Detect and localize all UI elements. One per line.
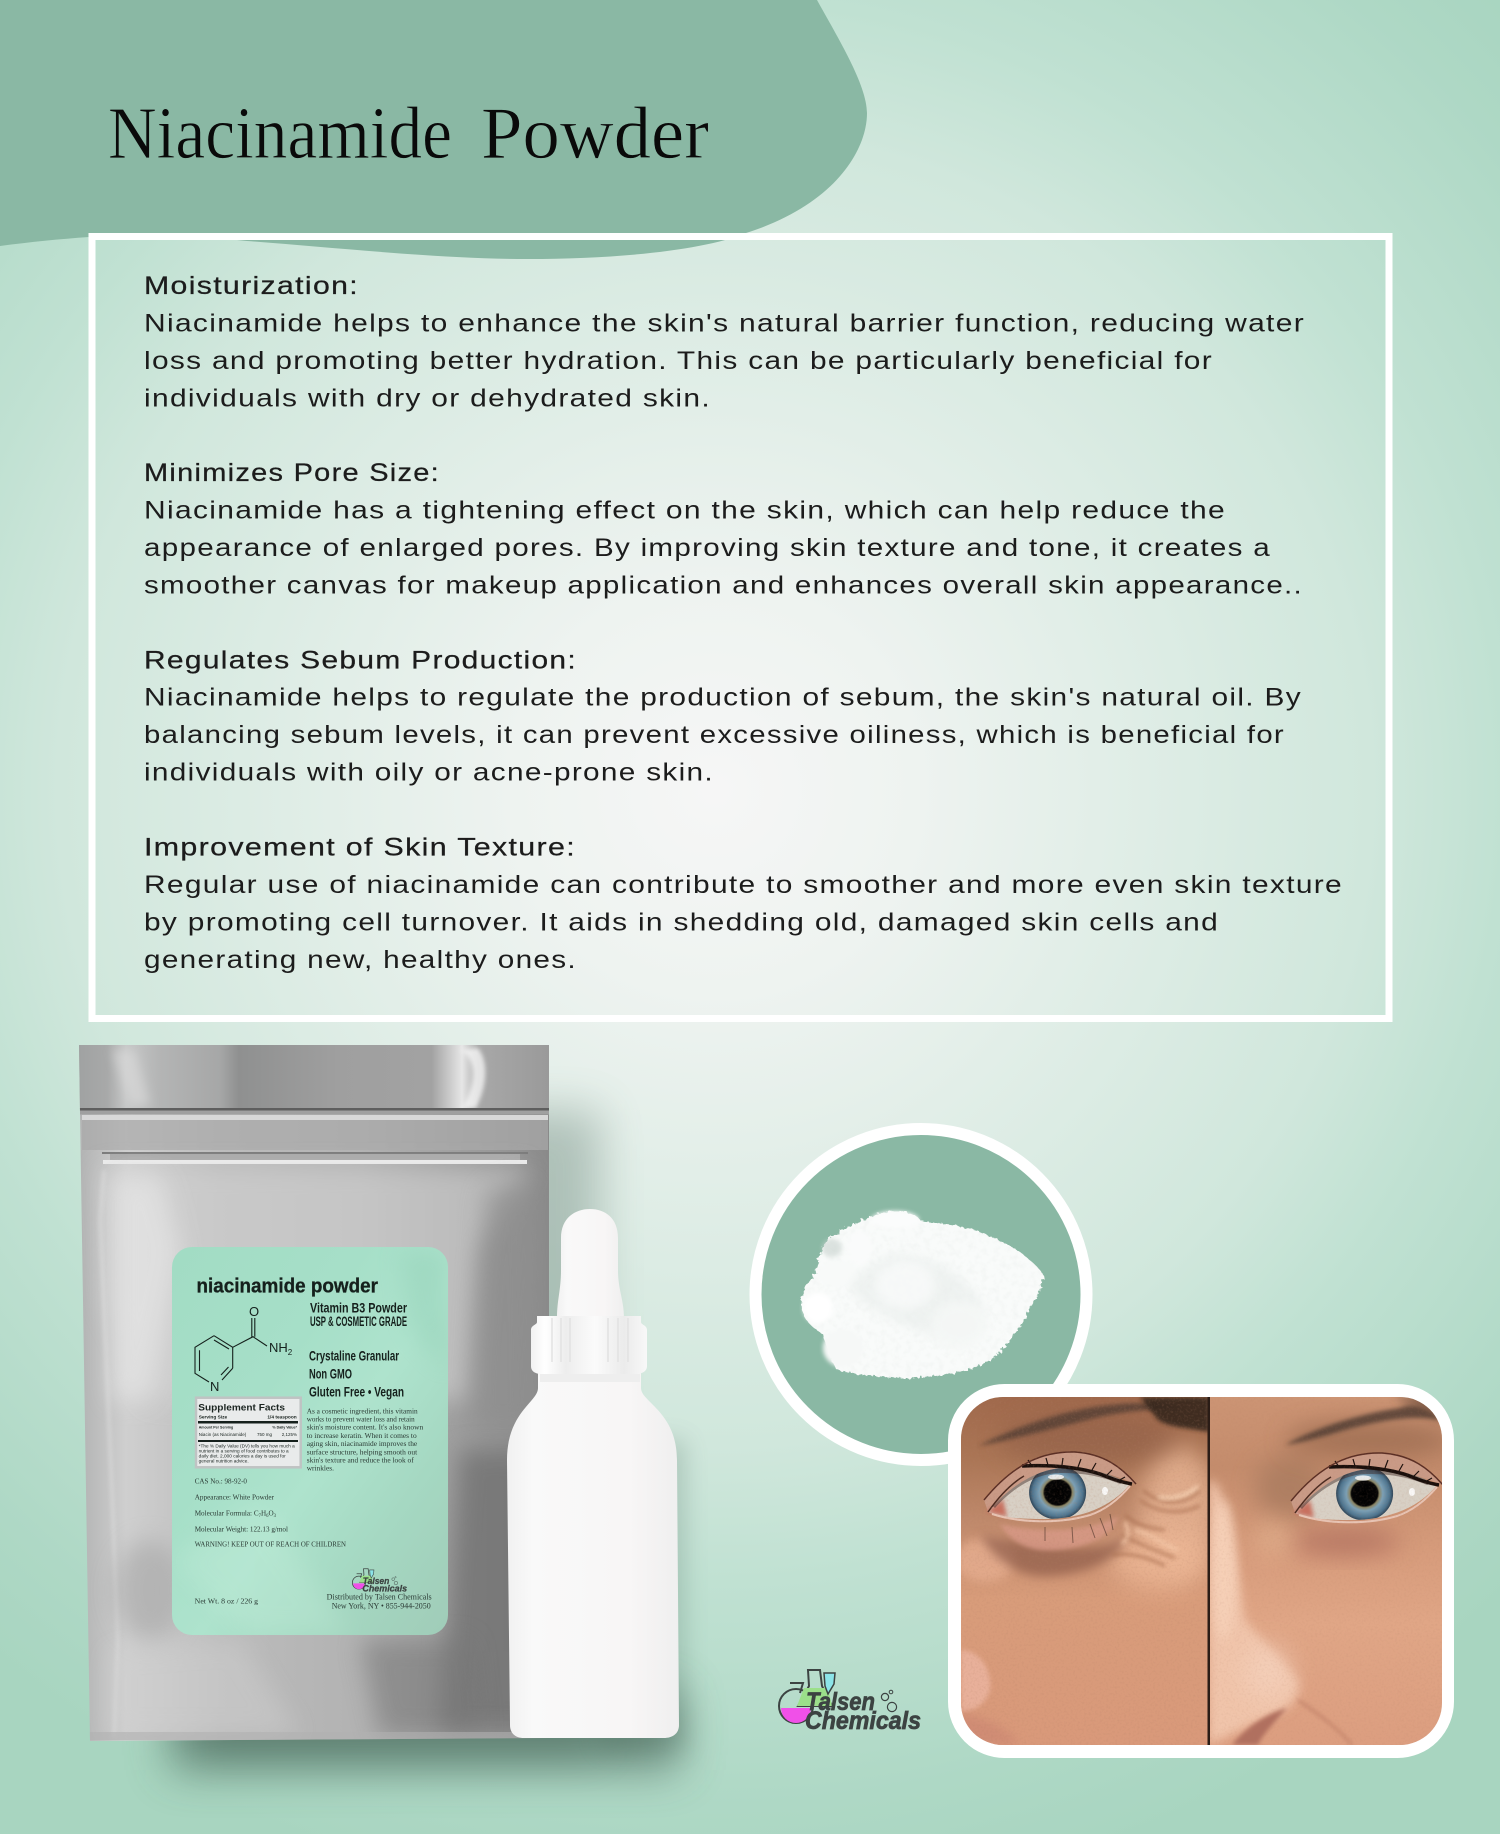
molecule diagram: 2 [288, 1348, 293, 1357]
title: Niacinamide [108, 93, 452, 175]
text block: pore size: Minimizes Pore Size: [144, 459, 440, 487]
powder circle [756, 1129, 1086, 1460]
label description: works to prevent water loss and retain [307, 1415, 415, 1424]
supplement facts box: *The % Daily Value (DV) tells you how much a [199, 1443, 295, 1448]
title [108, 93, 709, 175]
photo left: aged skin [955, 1397, 1216, 1745]
label description: skin's texture and reduce the look of [307, 1455, 414, 1464]
label attributes: Crystaline Granular [309, 1348, 399, 1364]
panel: benefits text frame [92, 236, 1389, 1018]
label specifications: Molecular Formula: C [195, 1508, 263, 1517]
header blob [0, 0, 867, 259]
molecule diagram [195, 1304, 293, 1394]
label attributes: Non GMO [309, 1366, 352, 1382]
text block: skin texture: Improvement of Skin Texture: [144, 834, 576, 862]
label title: niacinamide powder [196, 1276, 378, 1298]
label specifications: 7 [259, 1514, 261, 1519]
supplement facts box: daily diet. 2,000 calories a day is used for [199, 1453, 286, 1458]
title: Powder [481, 93, 709, 175]
label description: As a cosmetic ingredient, this vitamin [307, 1406, 418, 1415]
text block: pore size [144, 459, 1303, 599]
supplement facts box: nutrient in a serving of food contributes to a [199, 1448, 289, 1453]
label specifications: 3 [274, 1514, 276, 1519]
label specifications: O [268, 1508, 274, 1517]
molecule diagram: N [210, 1379, 219, 1394]
label specifications [195, 1476, 346, 1605]
label description: skin's moisture content. It's also known [307, 1423, 423, 1432]
label specifications: H [261, 1508, 267, 1517]
molecule diagram: O [249, 1304, 259, 1319]
supplement facts box: 2,125% [282, 1432, 297, 1437]
text block: pore size: smoother canvas for makeup application and enhances overall skin appearance.. [144, 571, 1303, 599]
label specifications: Molecular Weight: 122.13 g/mol [195, 1524, 288, 1533]
supplement facts box: general nutrition advice. [199, 1459, 249, 1464]
product: foil pouch [79, 1045, 550, 1741]
label distributor: Distributed by Talsen Chemicals [327, 1592, 432, 1601]
text block: sebum: individuals with oily or acne-prone skin. [144, 759, 714, 787]
label specifications: CAS No.: 98-92-0 [195, 1476, 247, 1485]
supplement facts box: Niacin (as Niacinamide) [199, 1432, 247, 1437]
label attributes [309, 1348, 404, 1400]
text block: sebum: Niacinamide helps to regulate the production of sebum, the skin's natural oil. By [144, 684, 1302, 712]
text block: skin texture [144, 834, 1343, 974]
label attributes: Gluten Free • Vegan [309, 1384, 404, 1400]
label specifications: Net Wt. 8 oz / 226 g [195, 1596, 258, 1605]
supplement facts box: Supplement Facts [198, 1403, 285, 1414]
text block: skin texture: by promoting cell turnover. It aids in shedding old, damaged skin cells and [144, 908, 1219, 936]
label distributor: New York, NY • 855-944-2050 [332, 1602, 431, 1611]
powder pile [802, 1211, 1044, 1378]
text block: skin texture: Regular use of niacinamide can contribute to smoother and more even skin texture [144, 871, 1343, 899]
photo right: smooth skin [1209, 1397, 1455, 1745]
label grade text: Vitamin B3 Powder [310, 1300, 407, 1316]
text block: sebum: balancing sebum levels, it can prevent excessive oiliness, which is beneficial for [144, 721, 1285, 749]
label grade text: USP & COSMETIC GRADE [310, 1313, 407, 1329]
text block: pore size: appearance of enlarged pores. By improving skin texture and tone, it creates a [144, 534, 1271, 562]
label small logo [352, 1569, 408, 1594]
supplement facts box: 1/4 teaspoon [267, 1414, 297, 1420]
label description: aging skin, niacinamide improves the [307, 1439, 418, 1448]
label specifications: Appearance: White Powder [195, 1492, 274, 1501]
before and after eye photo [954, 1390, 1455, 1752]
text block: skin texture: generating new, healthy ones. [144, 946, 577, 974]
label description: surface structure, helping smooth out [307, 1447, 418, 1456]
label specifications: WARNING! KEEP OUT OF REACH OF CHILDREN [195, 1540, 346, 1549]
supplement facts box: % Daily Value* [272, 1426, 298, 1430]
text block: sebum [144, 646, 1302, 787]
label description: to increase keratin. When it comes to [307, 1431, 417, 1440]
supplement facts box: Amount Per Serving [199, 1426, 233, 1430]
label grade text [310, 1300, 407, 1329]
label specifications: 6 [266, 1514, 269, 1519]
product: dropper bottle [507, 1209, 679, 1738]
text block: pore size: Niacinamide has a tightening effect on the skin, which can help reduce the [144, 497, 1226, 525]
text block: moisturization: loss and promoting better hydration. This can be particularly beneficial for [144, 347, 1213, 375]
supplement facts box: 750 mg [257, 1432, 272, 1437]
molecule diagram: NH [269, 1340, 288, 1355]
text block: moisturization: Niacinamide helps to enhance the skin's natural barrier function, reducing water [144, 309, 1305, 337]
product shadow [170, 1110, 685, 1770]
text block: moisturization: Moisturization: [144, 272, 359, 300]
brand logo [779, 1670, 921, 1735]
product label [172, 1247, 448, 1635]
label description: wrinkles. [307, 1463, 334, 1472]
photo divider [1208, 1397, 1210, 1745]
supplement facts box: Serving Size [199, 1414, 228, 1420]
label description [307, 1406, 423, 1472]
label distributor [327, 1592, 432, 1611]
text block: sebum: Regulates Sebum Production: [144, 646, 577, 674]
text block: moisturization [144, 272, 1305, 412]
text block: moisturization: individuals with dry or dehydrated skin. [144, 384, 711, 412]
supplement facts box [196, 1398, 301, 1467]
